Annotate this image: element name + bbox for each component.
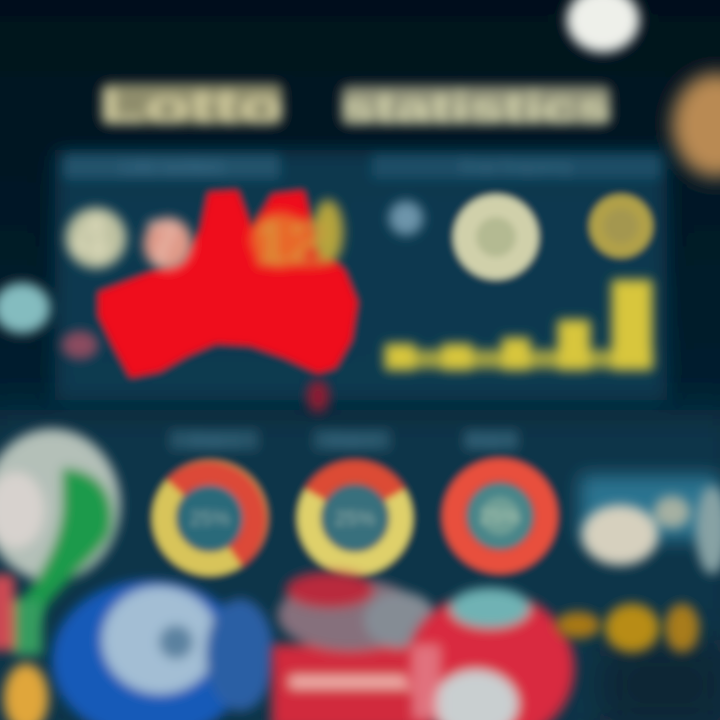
panel: statistics xyxy=(55,150,667,400)
lottery ball: bottom left orange xyxy=(0,575,48,720)
lottery ball: blue xyxy=(52,580,274,720)
icon: gold circle xyxy=(589,194,653,258)
donut chart 3: 25% xyxy=(480,506,520,528)
panel subheading left: Lotto numbers xyxy=(121,159,223,176)
title: statistics xyxy=(340,84,612,131)
lottery ball: green xyxy=(0,429,120,630)
lottery ball: red and grey xyxy=(272,572,436,720)
donut labels: Draw 2 xyxy=(328,433,376,450)
moon icon xyxy=(567,0,639,52)
panel subheading right: Draw frequency xyxy=(460,159,572,176)
icon: left pink marker xyxy=(62,331,98,359)
icon: pale circle xyxy=(453,194,539,280)
title xyxy=(100,80,612,132)
donut chart 1 xyxy=(164,472,256,564)
big number: 7 xyxy=(145,206,182,280)
panel subheading right xyxy=(372,155,660,179)
glowing orb right xyxy=(672,73,720,177)
donut labels xyxy=(170,430,518,450)
icon: small star xyxy=(389,201,423,235)
donut chart 3 xyxy=(454,470,546,562)
donut labels: Draw 1 xyxy=(190,433,238,450)
panel subheading left xyxy=(64,155,280,179)
big number: 4 xyxy=(72,201,110,277)
big number: 12 xyxy=(252,206,325,280)
big number xyxy=(66,200,343,280)
title: Lotto xyxy=(100,80,284,132)
gold coins xyxy=(556,604,699,652)
landscape illustration right xyxy=(580,475,720,540)
lottery ball: red and white xyxy=(406,588,574,720)
bar chart xyxy=(385,280,653,370)
donut labels: Draw 3 xyxy=(467,433,515,450)
map: Australia xyxy=(98,190,358,412)
donut chart 2: 25% xyxy=(335,508,375,530)
donut chart 1: 25% xyxy=(190,508,230,530)
donut chart 2 xyxy=(309,472,401,564)
icon: left teal blob xyxy=(0,283,50,333)
landscape foreground shapes xyxy=(582,486,720,574)
